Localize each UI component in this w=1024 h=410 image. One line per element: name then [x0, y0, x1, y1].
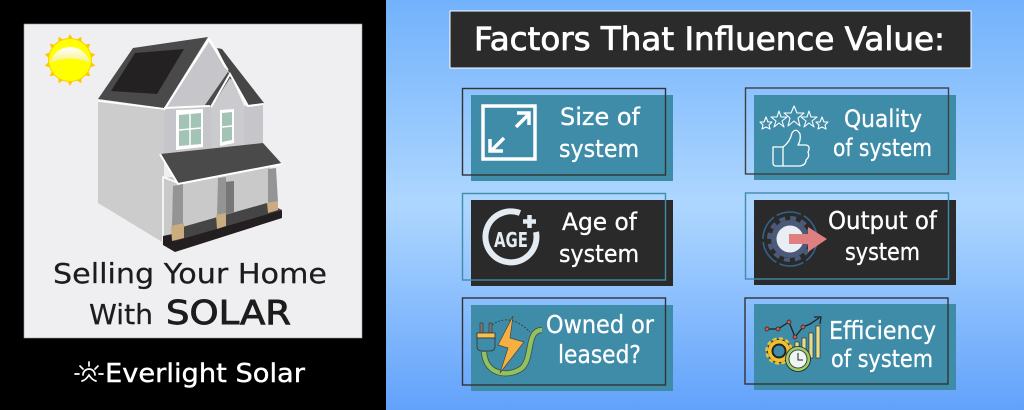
- card: efficiency of system: Efficiency: [829, 316, 936, 345]
- card: owned or leased: leased?: [558, 340, 641, 369]
- right blue gradient background: [386, 0, 1024, 410]
- card: quality of system: Quality: [844, 105, 922, 133]
- icon: expand arrows: [483, 106, 535, 159]
- card: age of system: Age of: [562, 208, 638, 236]
- logo: everlight solar: Everlight Solar: [105, 359, 305, 389]
- card: size of system: system: [559, 135, 639, 163]
- icon: gears, clock and chart: [765, 317, 821, 372]
- card: age of system: system: [559, 240, 639, 268]
- card: quality of system: of system: [833, 134, 932, 162]
- heading: selling your home with solar: [53, 257, 327, 332]
- card: efficiency of system: of system: [831, 345, 933, 373]
- icon: gear with arrow: [763, 212, 827, 266]
- card: owned or leased: [462, 298, 673, 391]
- title banner: Factors That Influence Value:: [474, 20, 945, 58]
- heading: selling your home with solar: With: [89, 298, 153, 331]
- card: output of system: Output of: [828, 206, 938, 235]
- card: owned or leased: Owned or: [546, 310, 655, 339]
- icon: stars and thumbs up: [760, 106, 828, 166]
- left black panel: [0, 0, 386, 410]
- icon: age badge: AGE: [494, 228, 528, 252]
- icon: age badge: [485, 211, 536, 262]
- icon: sun: [44, 34, 96, 86]
- card: size of system: [462, 88, 673, 181]
- icon: plug and lightning: [477, 316, 542, 373]
- card: output of system: system: [845, 238, 920, 266]
- card: quality of system: [746, 88, 956, 180]
- icon: logo sun: [75, 362, 103, 381]
- card: output of system: [746, 193, 956, 285]
- heading: selling your home with solar: Selling Your Home: [53, 257, 327, 290]
- house illustration: [98, 37, 282, 252]
- card: size of system: Size of: [560, 103, 641, 131]
- title banner: [450, 11, 971, 68]
- card: age of system: [462, 194, 673, 286]
- light card: selling your home: [24, 24, 362, 338]
- card: efficiency of system: [745, 298, 956, 390]
- heading: selling your home with solar: SOLAR: [166, 293, 291, 332]
